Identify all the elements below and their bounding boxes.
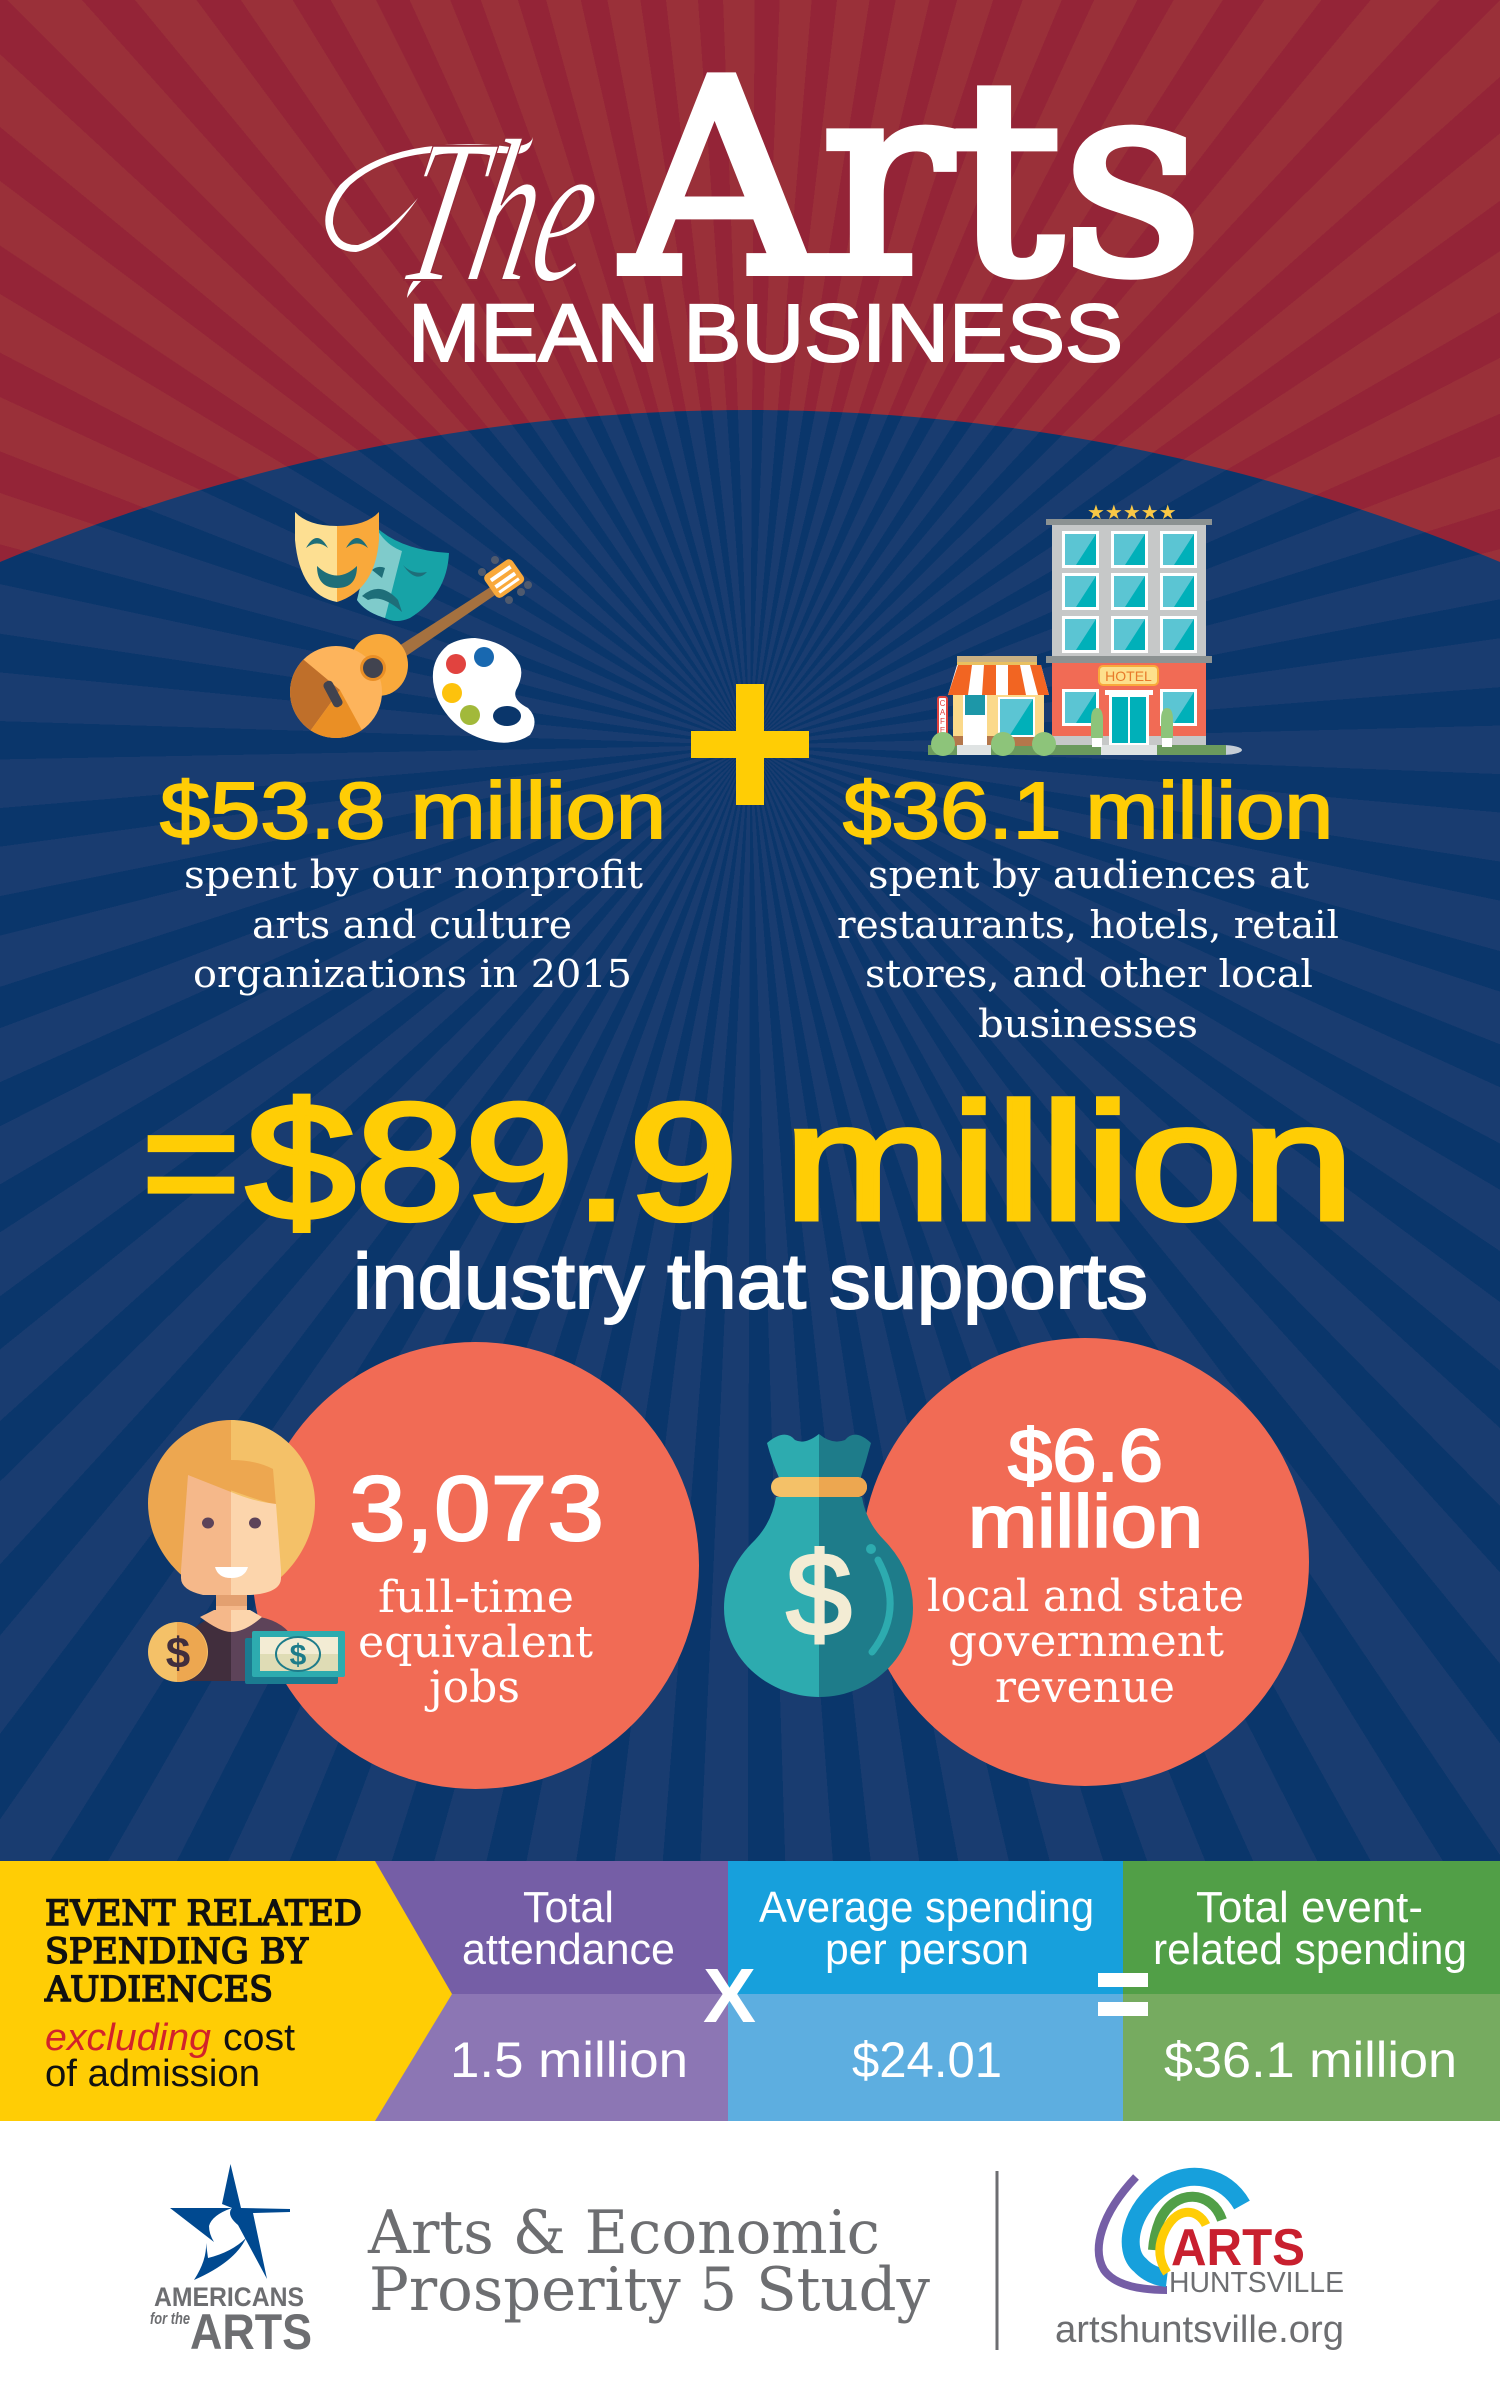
revenue description: revenue — [995, 1662, 1175, 1713]
description: restaurants, hotels, retail — [837, 903, 1339, 947]
description: stores, and other local — [865, 952, 1313, 996]
panel: average spending: Average spending — [759, 1883, 1094, 1932]
icon: money bag — [724, 1434, 913, 1697]
hotel upper floors — [1046, 519, 1212, 663]
logo: Americans for the Arts: AMERICANS — [154, 2282, 304, 2312]
supporting line: industry that supports — [353, 1237, 1148, 1325]
jobs description: full-time — [378, 1572, 574, 1623]
background: red sunburst header — [0, 0, 1500, 562]
total amount: million — [784, 1070, 1354, 1255]
panel: event related spending label: EVENT RELATED — [45, 1894, 362, 1934]
panel: average spending: $24.01 — [852, 2032, 1002, 2088]
description: arts and culture — [252, 903, 572, 947]
hotel ground floor — [1052, 663, 1206, 755]
logo: Americans for the Arts: ARTS — [190, 2304, 312, 2360]
website: artshuntsville.org — [1055, 2309, 1344, 2351]
jobs description: equivalent — [358, 1617, 593, 1668]
revenue amount: $6.6 — [1008, 1414, 1163, 1497]
panel: event related spending label: of admission — [45, 2053, 260, 2095]
cafe storefront — [931, 656, 1056, 756]
equals sign — [1098, 1973, 1148, 2016]
panel: total attendance: attendance — [462, 1925, 675, 1974]
footer — [150, 2164, 1344, 2360]
amount: $36.1 million — [843, 766, 1333, 855]
description — [184, 853, 643, 996]
panel: event related spending label: SPENDING BY — [45, 1932, 309, 1972]
logo: Americans for the Arts — [150, 2164, 312, 2360]
description: spent by audiences at — [868, 853, 1309, 897]
revenue description: local and state — [927, 1571, 1244, 1622]
icon: arts cluster — [280, 512, 535, 745]
panel: event related spending label: excluding — [45, 2017, 211, 2059]
icon: person with money — [148, 1420, 345, 1684]
jobs number: 3,073 — [349, 1458, 604, 1560]
description: organizations in 2015 — [193, 952, 632, 996]
panel: average spending — [728, 1861, 1123, 2121]
logo: Arts Huntsville: ARTS — [1171, 2219, 1305, 2277]
icon: comedy mask — [295, 512, 379, 602]
jobs circle — [252, 1342, 699, 1789]
hotel ground floor: HOTEL — [1105, 668, 1152, 684]
panel: total event-related spending: related spending — [1153, 1925, 1467, 1974]
background: blue sunburst arc panel — [0, 410, 1500, 1861]
cafe storefront: C — [940, 699, 946, 708]
panel: event related spending label — [0, 1861, 452, 2121]
revenue description — [927, 1571, 1244, 1713]
cafe storefront: E — [940, 726, 945, 735]
left stat: nonprofit spending — [160, 766, 666, 996]
title word: The — [325, 97, 620, 325]
icon: hotel and cafe — [928, 500, 1242, 756]
panel: event related spending label: AUDIENCES — [44, 1970, 273, 2010]
icon: coin — [148, 1622, 208, 1682]
title word: The: The — [384, 97, 620, 325]
jobs description — [358, 1572, 593, 1713]
cafe storefront: A — [940, 708, 946, 717]
description: businesses — [978, 1002, 1198, 1046]
panel: total event-related spending: Total event- — [1196, 1883, 1423, 1932]
title — [325, 24, 1203, 379]
revenue description: government — [948, 1616, 1224, 1667]
panel: event related spending label: cost — [223, 2017, 295, 2059]
multiply sign: X — [703, 1953, 756, 2039]
icon: guitar — [280, 556, 532, 745]
study name: Arts & Economic — [367, 2198, 880, 2268]
revenue amount: million — [968, 1480, 1203, 1563]
total amount — [142, 1070, 1354, 1255]
panel: total event-related spending — [1123, 1861, 1500, 2121]
icon: banknote: $ — [290, 1639, 307, 1672]
subtitle: MEAN BUSINESS — [408, 288, 1123, 379]
amount: $53.8 million — [160, 766, 666, 855]
total amount: = — [142, 1070, 240, 1255]
icon: tragedy mask — [357, 526, 449, 621]
icon: banknote — [245, 1631, 345, 1684]
panel: average spending: per person — [825, 1925, 1029, 1974]
plus sign — [691, 684, 809, 805]
panel: total attendance: Total — [523, 1883, 614, 1932]
panel: total attendance — [375, 1861, 728, 2121]
title word: Arts: Arts — [619, 24, 1203, 334]
panel: total attendance: 1.5 million — [450, 2032, 688, 2088]
event spending band — [0, 1861, 1500, 2121]
logo: Americans for the Arts: for the — [150, 2309, 190, 2328]
icon: paint palette — [433, 638, 535, 743]
icon: money bag: $ — [786, 1529, 852, 1661]
description — [837, 853, 1339, 1046]
revenue amount — [968, 1414, 1203, 1563]
star rating: ★★★★★ — [1087, 500, 1177, 524]
headline total — [142, 1070, 1354, 1325]
logo: Arts Huntsville: HUNTSVILLE — [1169, 2267, 1344, 2299]
jobs description: jobs — [424, 1662, 520, 1713]
logo: Arts Huntsville — [1099, 2177, 1344, 2299]
study name — [367, 2198, 930, 2325]
total amount: $89.9 — [246, 1070, 738, 1255]
right stat: audience spending — [837, 766, 1339, 1046]
description: spent by our nonprofit — [184, 853, 643, 897]
icon: coin: $ — [166, 1629, 190, 1678]
cafe storefront: F — [940, 717, 945, 726]
revenue circle — [861, 1338, 1309, 1786]
study name: Prosperity 5 Study — [369, 2255, 930, 2325]
panel: total event-related spending: $36.1 million — [1164, 2032, 1457, 2088]
